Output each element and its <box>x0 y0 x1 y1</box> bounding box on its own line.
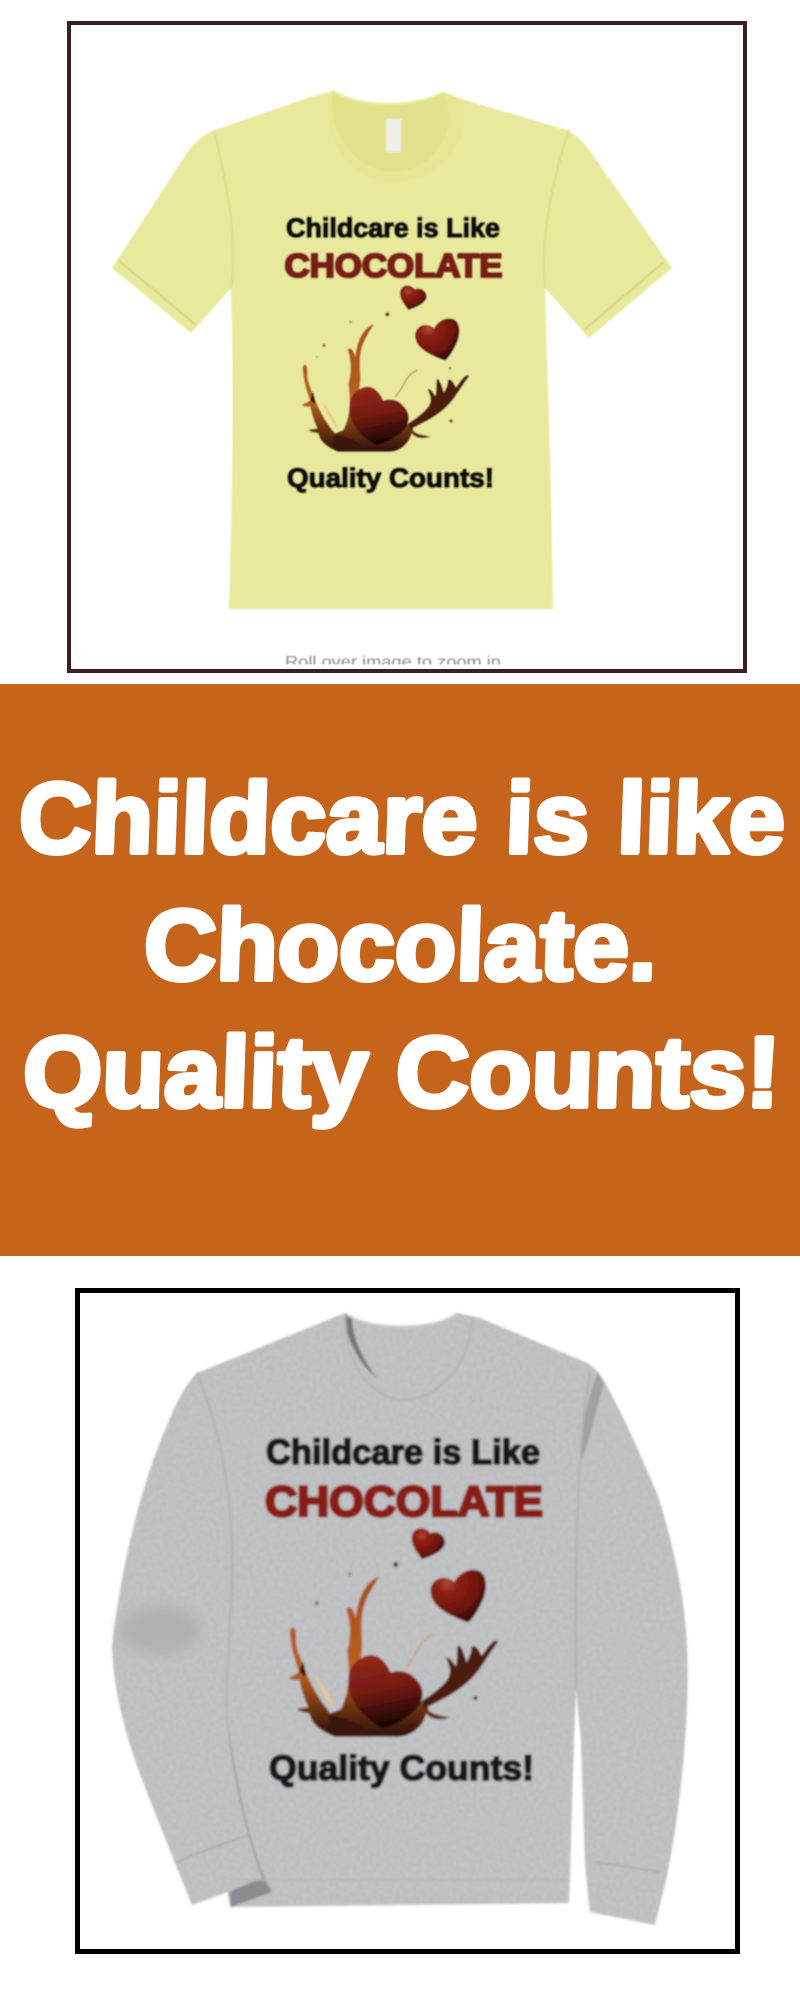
shirt text: chocolate: CHOCOLATE <box>284 247 502 284</box>
panel: t-shirt photo frame <box>69 23 745 671</box>
shirt text: chocolate: CHOCOLATE <box>265 1478 543 1526</box>
shirt text: quality counts: Quality Counts! <box>287 463 494 493</box>
icon: main heart <box>349 387 409 445</box>
icon: large floating heart <box>430 1570 486 1622</box>
icon: large floating heart <box>415 318 459 361</box>
right splash arm <box>408 375 469 430</box>
shirt text: childcare is like: Childcare is Like <box>266 1433 540 1472</box>
right splash arm <box>422 1641 498 1709</box>
panel: orange title banner <box>0 684 800 1256</box>
sweatshirt illustration <box>112 1313 688 1925</box>
print: splash and hearts <box>302 285 469 452</box>
title line 1: Childcare is like <box>17 763 787 874</box>
icon: small floating heart <box>400 285 427 310</box>
shirt text: quality counts: Quality Counts! <box>269 1749 534 1788</box>
icon: main heart <box>348 1655 423 1728</box>
t-shirt illustration <box>112 91 672 609</box>
print: splash and hearts <box>289 1528 498 1737</box>
title line 2: Chocolate. <box>142 890 659 1001</box>
shirt text: childcare is like: Childcare is Like <box>286 213 500 243</box>
panel: sweatshirt photo frame <box>78 1290 738 1952</box>
title line 3: Quality Counts! <box>21 1017 782 1128</box>
sweatshirt shading <box>120 1313 660 1907</box>
clipped caption: roll over image: Roll over image to zoom in <box>285 654 501 671</box>
icon: small floating heart <box>412 1528 445 1559</box>
